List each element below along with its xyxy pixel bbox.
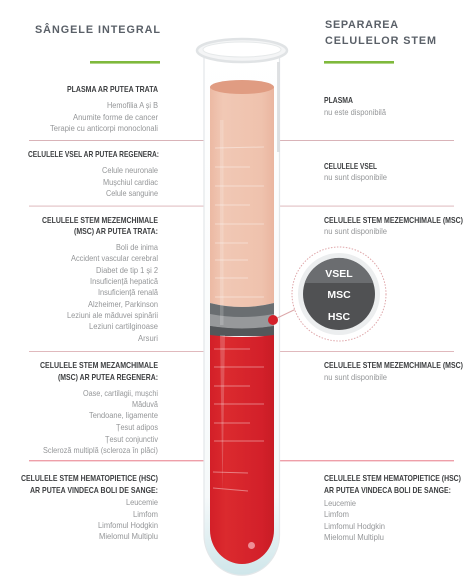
left block: MSC treat: [42, 215, 158, 343]
left block: plasma: Hemofilia A și B: [107, 100, 158, 110]
left block: MSC treat: Leziuni cartilginoase: [89, 321, 158, 331]
left block: VSEL: Celule neuronale: [102, 165, 158, 175]
right block: VSEL: [324, 161, 387, 182]
left block: MSC regenerate: Tendoane, ligamente: [89, 410, 158, 420]
right block: MSC one: [324, 215, 463, 236]
left block: HSC: AR PUTEA VINDECA BOLI DE SANGE:: [30, 485, 158, 495]
bubble: [248, 542, 255, 549]
glass rim: [197, 39, 287, 62]
left block: MSC treat: Leziuni ale măduvei spinării: [67, 310, 158, 320]
heading: stem cell separation: SEPARAREA: [325, 19, 398, 31]
heading: whole blood: SÂNGELE INTEGRAL: [35, 23, 160, 36]
left block: MSC regenerate: Măduvă: [132, 399, 158, 409]
left block: VSEL: [28, 149, 159, 198]
left block: HSC: Limfom: [133, 509, 158, 519]
row separators: [29, 140, 454, 461]
left block: MSC treat: Arsuri: [138, 333, 158, 343]
left block: MSC regenerate: [40, 360, 159, 455]
right block: HSC: Limfom: [324, 509, 349, 519]
left block: plasma: [50, 84, 158, 133]
measurement ticks: [213, 147, 264, 491]
right block: HSC: Mielomul Multiplu: [324, 532, 384, 542]
marker dot: [268, 315, 278, 325]
left block: plasma: Terapie cu anticorpi monoclonali: [50, 123, 158, 133]
left block: plasma: PLASMA AR PUTEA TRATA: [67, 84, 158, 94]
left block: HSC: Limfomul Hodgkin: [98, 520, 158, 530]
left block: HSC: Leucemie: [126, 497, 158, 507]
right block: VSEL: nu sunt disponibile: [324, 172, 387, 182]
callout: cell layers: VSEL: [325, 268, 353, 280]
right block: plasma: PLASMA: [324, 95, 353, 105]
left block: HSC: Mielomul Multiplu: [99, 531, 158, 541]
left block: MSC regenerate: CELULELE STEM MEZAMCHIMALE: [40, 360, 158, 370]
right block: MSC one: nu sunt disponibile: [324, 226, 387, 236]
left block: HSC: CELULELE STEM HEMATOPIETICE (HSC): [21, 473, 158, 483]
left block: VSEL: CELULELE VSEL AR PUTEA REGENERA:: [28, 149, 159, 159]
callout: cell layers: HSC: [328, 311, 351, 323]
left block: VSEL: Celule sanguine: [106, 188, 158, 198]
callout: cell layers: MSC: [327, 289, 351, 301]
right block: HSC: AR PUTEA VINDECA BOLI DE SANGE:: [324, 485, 451, 495]
callout: cell layers: [268, 247, 386, 341]
left block: VSEL: Mușchiul cardiac: [103, 177, 159, 187]
left block: plasma: Anumite forme de cancer: [73, 112, 158, 122]
heading: whole blood: [35, 23, 160, 64]
test tube: [197, 39, 287, 575]
left block: MSC treat: Insuficiență renală: [98, 287, 158, 297]
right block: MSC two: [324, 360, 463, 382]
left block: HSC: [21, 473, 158, 541]
heading: stem cell separation: [324, 19, 436, 64]
right block: plasma: nu este disponibilă: [324, 107, 386, 117]
right block: HSC: Limfomul Hodgkin: [324, 521, 385, 531]
left block: MSC treat: CELULELE STEM MEZEMCHIMALE: [42, 215, 158, 225]
stem cell band: [210, 303, 274, 336]
right block: plasma: [324, 95, 386, 117]
right block: MSC two: nu sunt disponibile: [324, 372, 387, 382]
left block: MSC treat: Diabet de tip 1 și 2: [96, 265, 158, 275]
glass body: [204, 52, 280, 575]
left block: MSC regenerate: Țesut adipos: [116, 422, 158, 432]
red blood cell layer: [210, 335, 274, 564]
heading: stem cell separation: CELULELOR STEM: [325, 35, 436, 47]
highlight stripe: [220, 120, 224, 325]
right block: VSEL: CELULELE VSEL: [324, 161, 377, 171]
left block: MSC treat: (MSC) AR PUTEA TRATA:: [74, 226, 158, 236]
left block: MSC regenerate: Scleroză multiplă (scleroza în plăci): [43, 445, 158, 455]
left block: MSC regenerate: (MSC) AR PUTEA REGENERA:: [58, 372, 158, 382]
left block: MSC treat: Insuficiență hepatică: [90, 276, 158, 286]
left block: MSC regenerate: Țesut conjunctiv: [105, 434, 159, 444]
plasma layer: [210, 80, 274, 307]
right block: HSC: [324, 473, 461, 542]
left block: MSC regenerate: Oase, cartilagii, mușchi: [83, 388, 158, 398]
left block: MSC treat: Boli de inima: [116, 242, 158, 252]
left block: MSC treat: Accident vascular cerebral: [71, 253, 158, 263]
right block: HSC: Leucemie: [324, 498, 356, 508]
left block: MSC treat: Alzheimer, Parkinson: [88, 299, 158, 309]
